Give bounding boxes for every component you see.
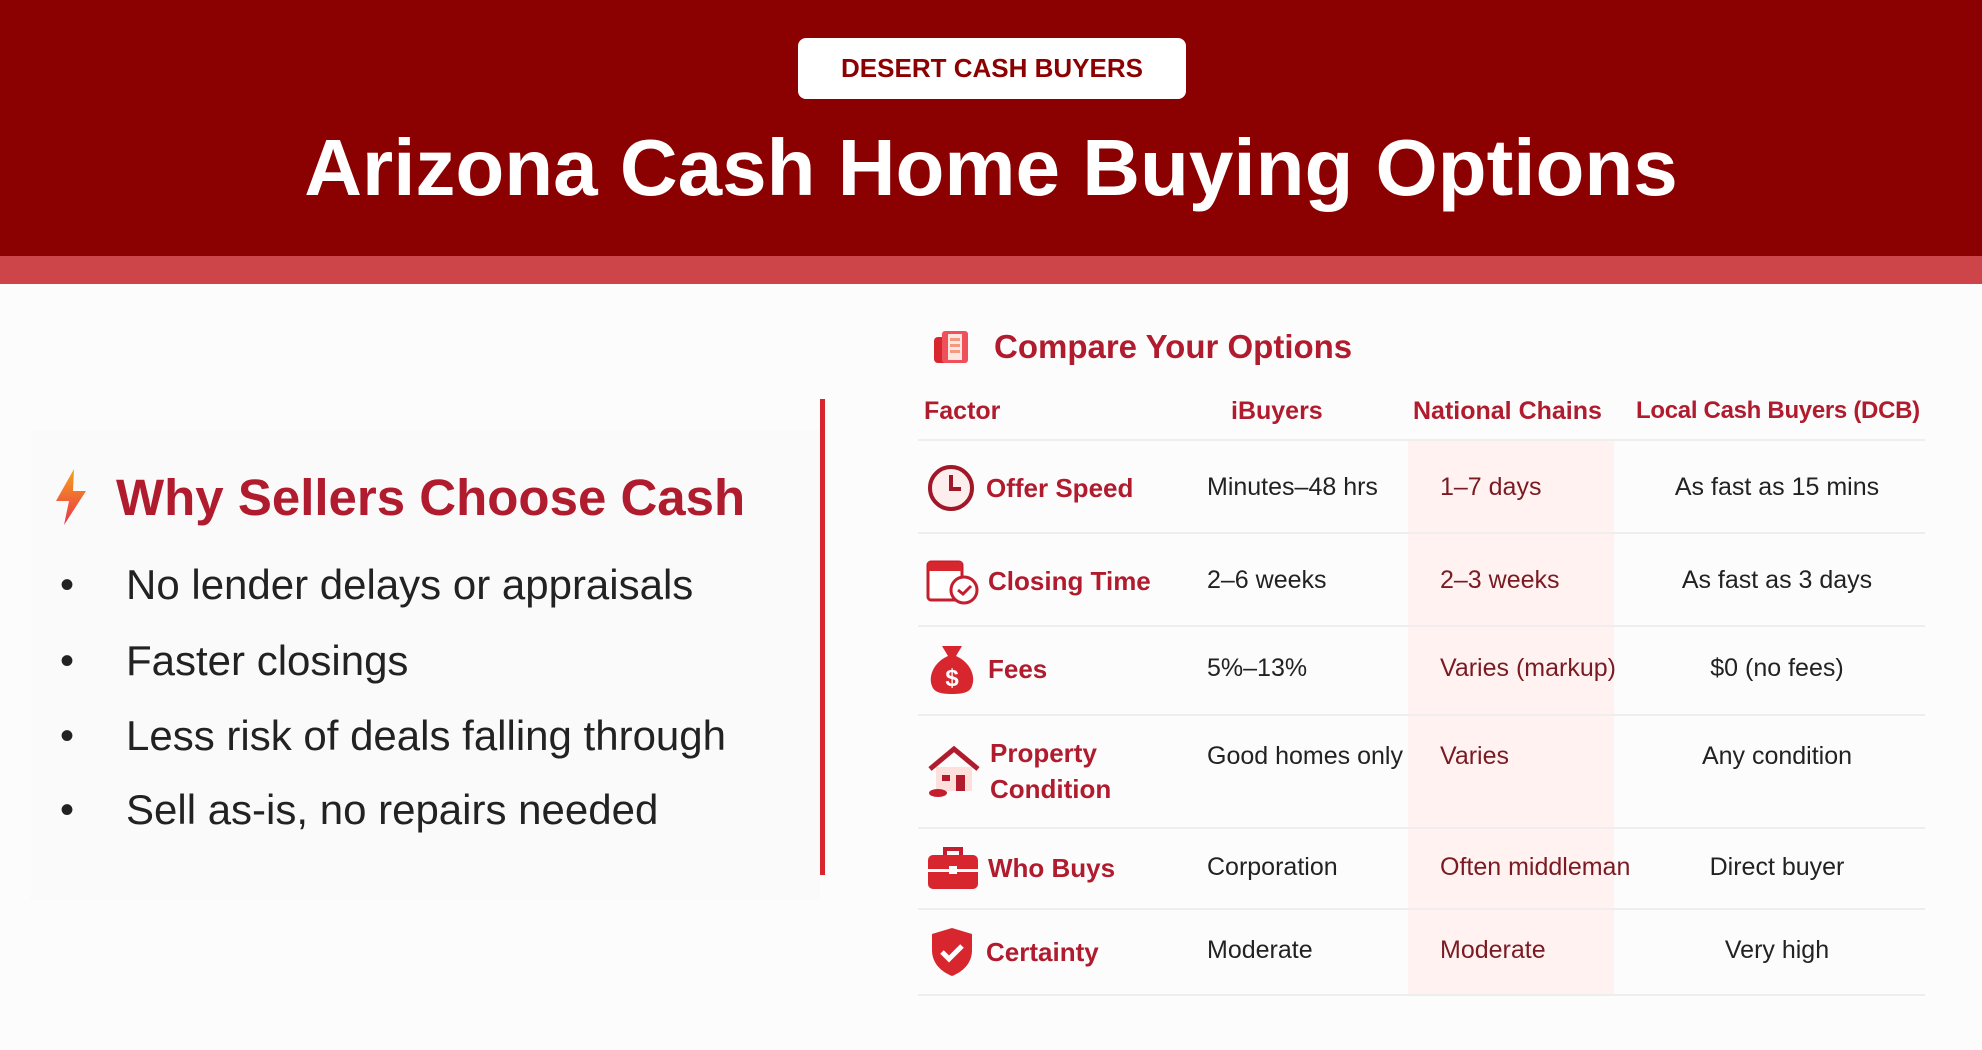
badge bbox=[798, 38, 1186, 99]
badge: DESERT CASH BUYERS bbox=[841, 53, 1143, 83]
row: property condition bbox=[928, 738, 1852, 804]
row: who buys: Corporation bbox=[1207, 853, 1338, 881]
table: comparison: Local Cash Buyers (DCB) bbox=[1636, 397, 1920, 424]
title: Arizona Cash Home Buying Options bbox=[304, 123, 1678, 212]
table: comparison bbox=[918, 397, 1925, 996]
row: closing time bbox=[926, 560, 1872, 604]
row: offer speed: 1–7 days bbox=[1440, 473, 1541, 501]
panel: why sellers choose cash bbox=[30, 430, 820, 900]
row: fees: $ bbox=[945, 665, 959, 692]
row: certainty: Moderate bbox=[1440, 936, 1546, 964]
row: certainty: Certainty bbox=[986, 937, 1099, 967]
bullet list: Less risk of deals falling through bbox=[126, 712, 726, 759]
row: closing time: 2–6 weeks bbox=[1207, 566, 1327, 594]
table header: Factor bbox=[924, 397, 1000, 425]
table: comparison: National Chains bbox=[1413, 397, 1602, 425]
row: property condition: Varies bbox=[1440, 742, 1509, 770]
bullet list bbox=[60, 561, 726, 833]
row: property condition: Condition bbox=[990, 774, 1111, 804]
bullet list: • bbox=[60, 714, 74, 758]
bullet list: • bbox=[60, 562, 74, 606]
bullet list: • bbox=[60, 638, 74, 682]
row: offer speed: Offer Speed bbox=[986, 473, 1133, 503]
row: certainty: Moderate bbox=[1207, 936, 1313, 964]
heading: compare your options: Compare Your Options bbox=[994, 328, 1352, 365]
bullet list: Faster closings bbox=[126, 637, 408, 684]
row: certainty bbox=[932, 928, 1829, 976]
row: fees bbox=[930, 646, 1844, 694]
row: fees: 5%–13% bbox=[1207, 654, 1307, 682]
row: property condition: Property bbox=[990, 738, 1097, 768]
row: fees: Varies (markup) bbox=[1440, 654, 1616, 682]
row: closing time: Closing Time bbox=[988, 566, 1151, 596]
row: closing time: As fast as 3 days bbox=[1682, 566, 1872, 594]
heading: why sellers choose cash: Why Sellers Choose Cash bbox=[116, 468, 745, 526]
row: offer speed: As fast as 15 mins bbox=[1675, 473, 1879, 501]
row: property condition: Any condition bbox=[1702, 742, 1852, 770]
row: offer speed: Minutes–48 hrs bbox=[1207, 473, 1378, 501]
row: who buys: Direct buyer bbox=[1710, 853, 1844, 881]
bullet list: No lender delays or appraisals bbox=[126, 561, 693, 608]
row: who buys: Often middleman bbox=[1440, 853, 1630, 881]
row: closing time: 2–3 weeks bbox=[1440, 566, 1560, 594]
table: comparison: iBuyers bbox=[1231, 397, 1323, 425]
row: fees: $0 (no fees) bbox=[1710, 654, 1844, 682]
row: who buys: Who Buys bbox=[988, 853, 1115, 883]
row: fees: Fees bbox=[988, 654, 1047, 684]
row: who buys bbox=[928, 847, 1844, 889]
row: property condition: Good homes only bbox=[1207, 742, 1403, 770]
bullet list: • bbox=[60, 788, 74, 832]
row: certainty: Very high bbox=[1725, 936, 1829, 964]
bullet list: Sell as-is, no repairs needed bbox=[126, 786, 658, 833]
row: offer speed bbox=[928, 465, 1879, 511]
header band bbox=[0, 0, 1982, 256]
